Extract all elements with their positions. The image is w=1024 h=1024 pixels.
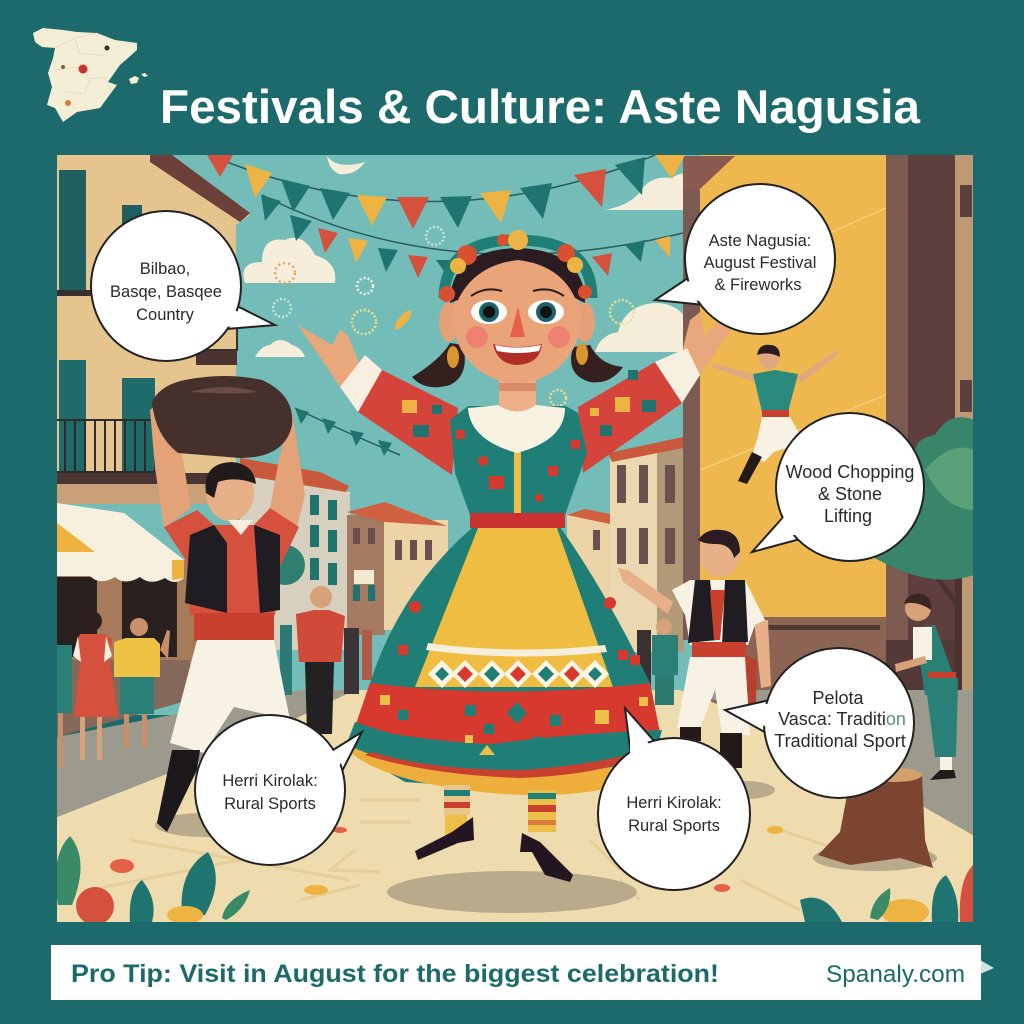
pro tip banner: Spanaly.com xyxy=(826,961,965,988)
title: Festivals & Culture: Aste Nagusia xyxy=(160,80,921,133)
callout: Herri Kirolak right xyxy=(598,708,750,890)
neck and collar xyxy=(499,380,536,412)
ground tile pattern xyxy=(90,800,900,910)
callout: Pelota Vasca: Pelota xyxy=(812,688,865,708)
bodice xyxy=(450,406,587,515)
left building xyxy=(57,155,250,737)
background town buildings xyxy=(240,437,684,652)
arms and hands xyxy=(298,325,360,387)
fireworks xyxy=(273,227,634,406)
callout: Bilbao xyxy=(91,211,275,361)
callout: Aste Nagusia xyxy=(655,184,835,334)
foreground foliage xyxy=(56,836,973,925)
diamonds xyxy=(428,660,609,688)
people: background crowd left xyxy=(57,611,170,768)
callout: Bilbao: Bilbao, xyxy=(140,260,190,278)
callout: Wood Chopping xyxy=(752,413,924,561)
callout: Pelota Vasca: Vasca: Tradition xyxy=(778,709,906,729)
callout: Herri Kirolak left xyxy=(195,715,362,865)
callout: Herri Kirolak right: Rural Sports xyxy=(628,817,720,835)
bunting xyxy=(205,153,685,456)
ground shadows xyxy=(155,781,937,913)
callout: Aste Nagusia: August Festival xyxy=(704,254,816,272)
callout: Wood Chopping: Wood Chopping xyxy=(786,462,914,482)
callout: Pelota Vasca xyxy=(725,648,914,798)
flying dancer xyxy=(712,345,839,484)
pro tip banner xyxy=(51,945,994,1000)
ground xyxy=(57,690,973,922)
skirt xyxy=(350,527,660,790)
icon: map of Spain xyxy=(33,28,148,122)
man with green trousers xyxy=(895,594,958,780)
callout: Herri Kirolak right: Herri Kirolak: xyxy=(626,794,722,812)
skirt dots xyxy=(398,597,640,665)
callout: Bilbao: Basqe, Basqee xyxy=(110,283,222,301)
ears xyxy=(439,302,456,342)
tree xyxy=(874,417,973,690)
man in vest, right xyxy=(618,530,771,768)
awning xyxy=(57,503,184,582)
callout: Herri Kirolak left: Rural Sports xyxy=(224,795,316,813)
confetti xyxy=(110,827,730,892)
right building xyxy=(683,155,973,704)
callout: Herri Kirolak left: Herri Kirolak: xyxy=(222,772,318,790)
people: background crowd centre xyxy=(280,586,678,734)
giant dancer xyxy=(298,230,735,882)
braids xyxy=(412,343,465,387)
callout: Bilbao: Country xyxy=(136,306,195,324)
callout: Aste Nagusia: & Fireworks xyxy=(714,276,802,294)
panel: festival scene xyxy=(56,153,974,925)
stone lifter xyxy=(150,376,305,832)
tree stump xyxy=(818,768,933,868)
flower crown xyxy=(444,240,592,298)
callout: Wood Chopping: & Stone xyxy=(818,484,882,504)
clouds xyxy=(243,156,700,357)
callout: Pelota Vasca: Traditional Sport xyxy=(774,731,906,751)
legs and shoes xyxy=(444,785,470,815)
sky xyxy=(64,155,700,715)
callout: Wood Chopping: Lifting xyxy=(824,506,872,526)
pro tip banner: Pro Tip: Visit in August for the biggest celebration! xyxy=(71,960,719,988)
face xyxy=(453,253,581,383)
callout: Aste Nagusia: Aste Nagusia: xyxy=(709,232,811,250)
hair xyxy=(450,248,585,303)
